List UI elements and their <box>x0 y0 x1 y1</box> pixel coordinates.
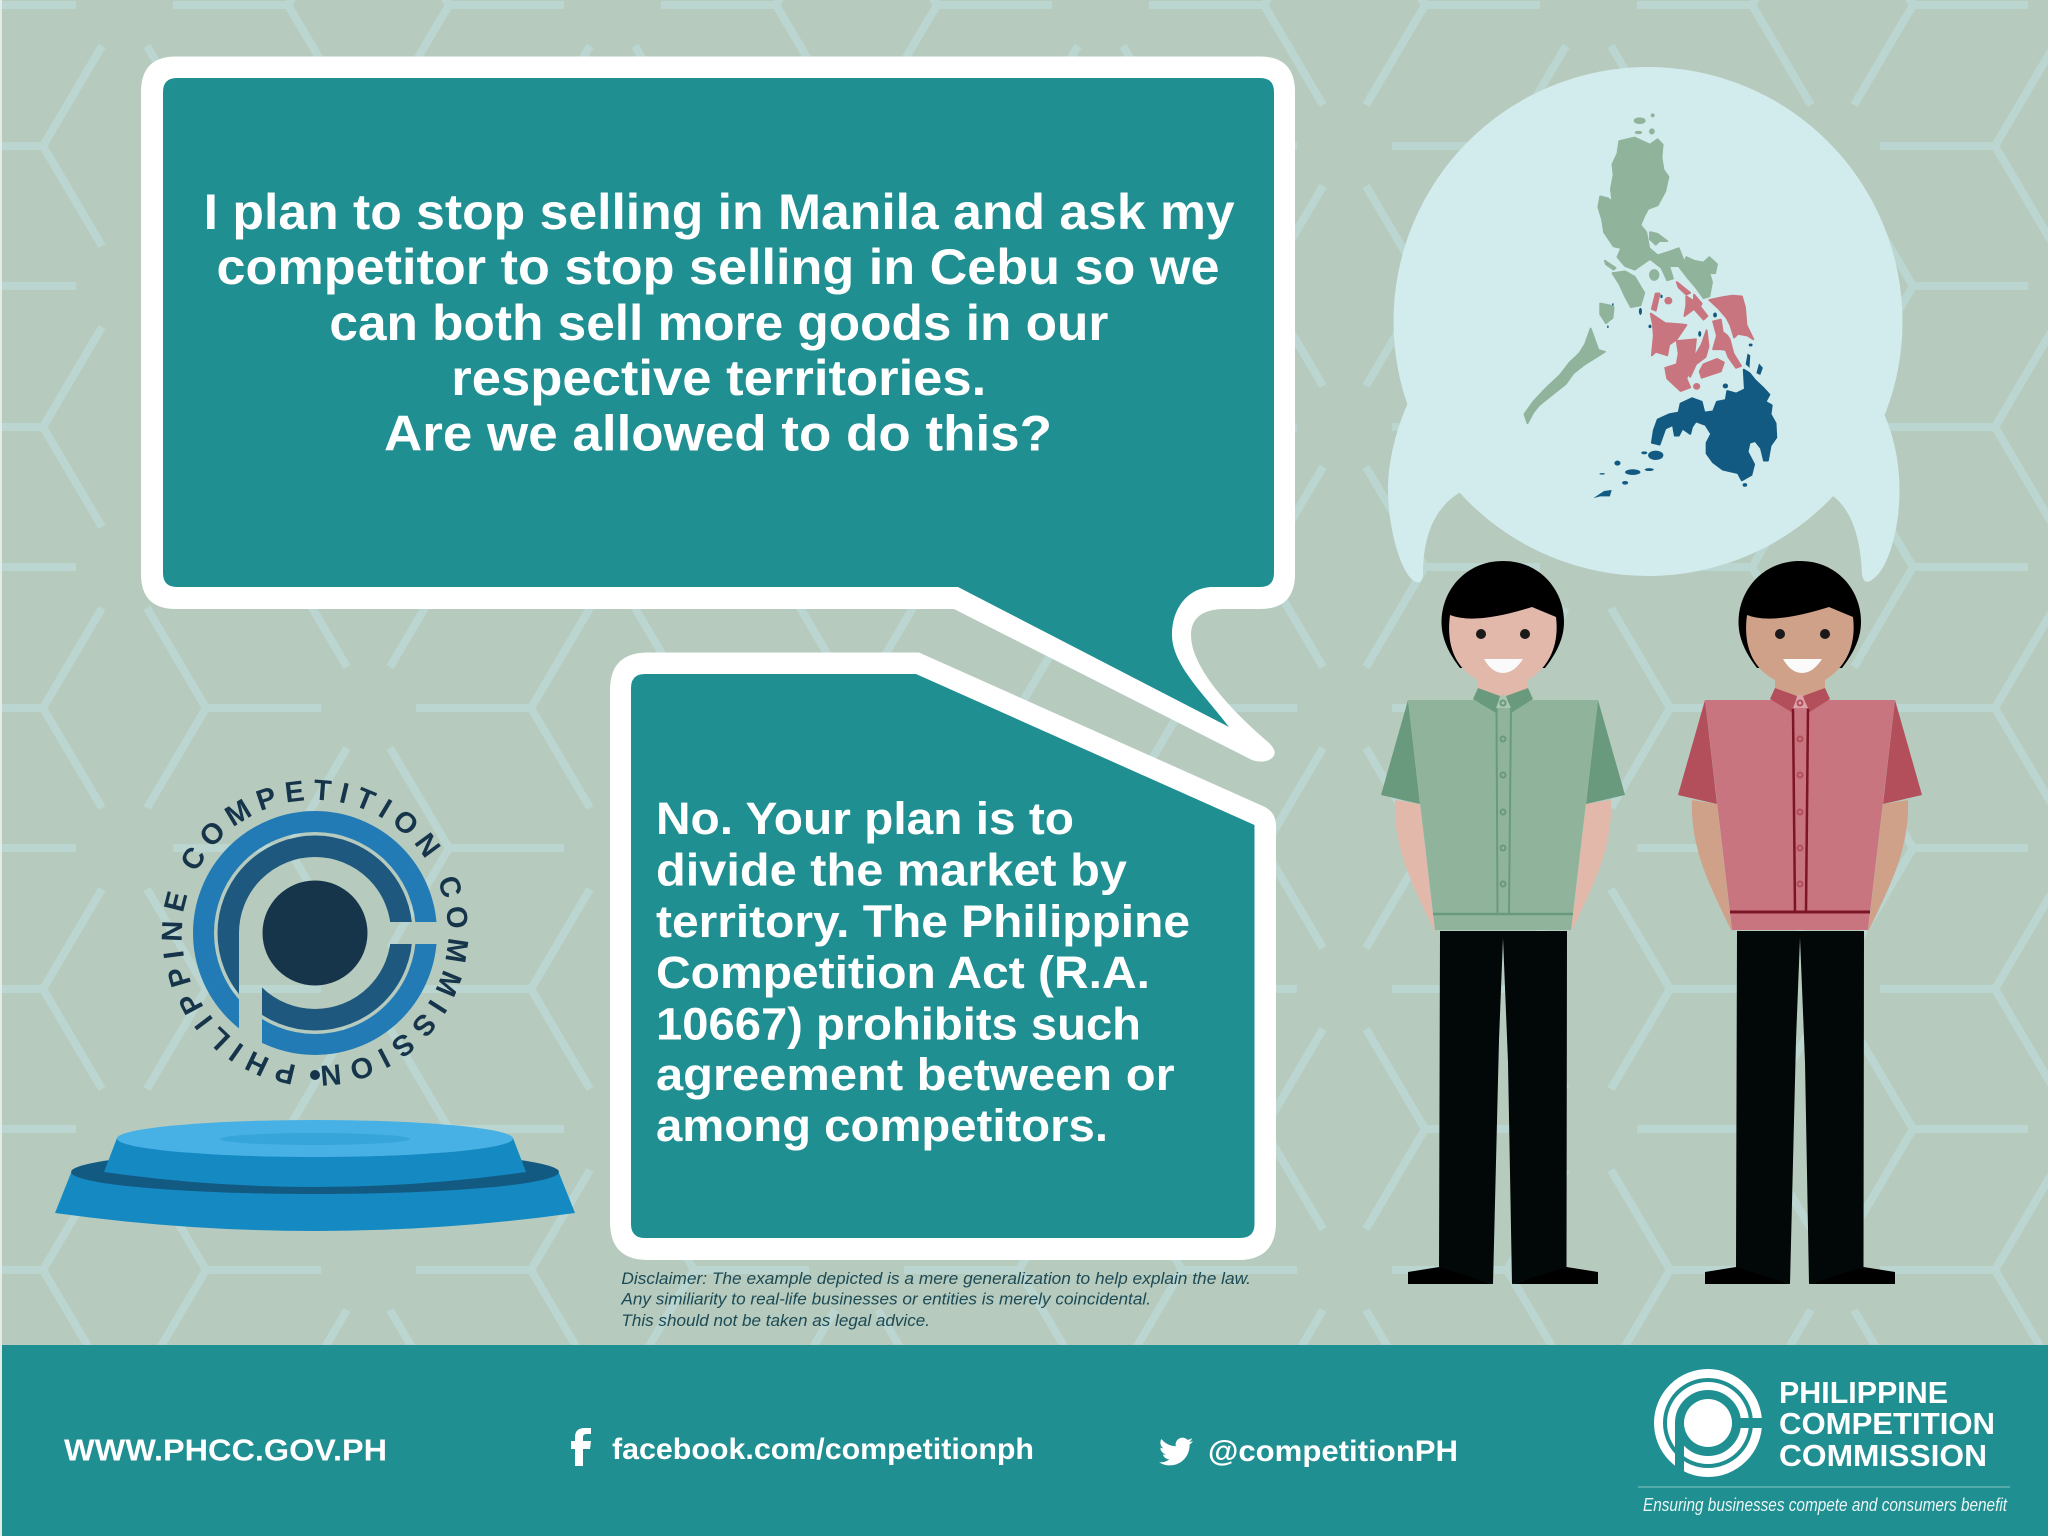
white PCC logo mark <box>1658 1374 1758 1472</box>
question text: Are we allowed to do this? <box>384 406 1052 462</box>
organisation name: COMMISSION <box>1779 1438 1987 1473</box>
logo centre dot <box>262 880 368 986</box>
shirt body <box>1705 700 1895 930</box>
eyes and smile <box>1476 629 1530 673</box>
question text: respective territories. <box>451 350 986 406</box>
question text: competitor to stop selling in Cebu so we <box>216 239 1220 295</box>
answer text: No. Your plan is to <box>656 793 1074 844</box>
collar <box>1473 688 1533 713</box>
icon: twitter <box>1159 1438 1193 1465</box>
collar <box>1770 688 1830 713</box>
Luzon region <box>1524 114 1717 423</box>
answer text: divide the market by <box>656 844 1127 896</box>
answer text: among competitors. <box>656 1100 1108 1151</box>
disclaimer text <box>620 1270 1251 1330</box>
map of the Philippines <box>1524 114 1776 498</box>
logo mark <box>204 822 426 1044</box>
question text <box>204 184 1235 462</box>
organisation name <box>1779 1375 1995 1473</box>
face and neck <box>1449 607 1557 698</box>
sleeves <box>1381 700 1625 804</box>
answer text: agreement between or <box>656 1049 1175 1100</box>
answer text: Competition Act (R.A. <box>656 947 1150 998</box>
disclaimer text: This should not be taken as legal advice. <box>621 1312 930 1330</box>
facebook handle: facebook.com/competitionph <box>612 1433 1034 1466</box>
trousers and shoes <box>1408 931 1598 1284</box>
shirt body <box>1408 700 1598 930</box>
question text: can both sell more goods in our <box>329 295 1108 351</box>
podium <box>55 1120 575 1231</box>
trousers and shoes <box>1705 931 1895 1284</box>
website link: WWW.PHCC.GOV.PH <box>64 1433 387 1468</box>
placket, buttons and hem <box>1730 695 1870 912</box>
icon: facebook <box>571 1428 591 1466</box>
eyes and smile <box>1775 629 1830 673</box>
panel: answer speech bubble <box>610 652 1276 1260</box>
answer text <box>656 793 1190 1151</box>
answer text: territory. The Philippine <box>656 896 1190 947</box>
answer text: 10667) prohibits such <box>656 998 1141 1050</box>
sleeves <box>1678 700 1922 804</box>
arms <box>1692 800 1908 932</box>
disclaimer text: Any similiarity to real-life businesses or entities is merely coincidental. <box>620 1290 1151 1308</box>
face and neck <box>1746 607 1854 698</box>
organisation name: PHILIPPINE <box>1779 1375 1948 1410</box>
panel: question speech bubble <box>141 56 1295 762</box>
disclaimer text: Disclaimer: The example depicted is a mere generalization to help explain the law. <box>621 1270 1251 1288</box>
question text: I plan to stop selling in Manila and ask my <box>204 184 1235 240</box>
arms <box>1395 800 1611 932</box>
man in green shirt <box>1381 561 1625 1284</box>
logo separator dot <box>310 1070 320 1080</box>
Mindanao region <box>1593 295 1776 498</box>
hair <box>1738 561 1861 668</box>
thought bubble with map <box>1388 67 1902 582</box>
organisation name: COMPETITION <box>1779 1406 1995 1441</box>
twitter handle: @competitionPH <box>1208 1435 1458 1468</box>
man in pink shirt <box>1678 561 1922 1284</box>
Visayas region <box>1651 282 1753 391</box>
round PCC logo <box>162 780 468 1086</box>
hair <box>1442 561 1564 668</box>
circular logo text: PHILIPPINE COMPETITION COMMISSION <box>162 780 468 1086</box>
placket, buttons and hem <box>1433 695 1573 914</box>
footer band <box>0 1345 2048 1536</box>
